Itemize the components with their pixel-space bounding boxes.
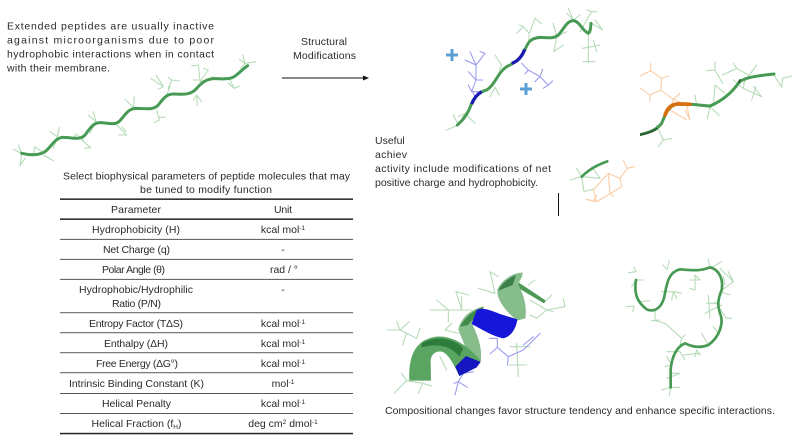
parameters table: [60, 198, 353, 434]
table heading: [63, 170, 351, 196]
parameters table: -1: [299, 339, 306, 346]
text block: useful modifications: positive charge and hydrophobicity.: [375, 177, 538, 189]
text block: useful modifications: achiev: [375, 149, 408, 161]
text block: extended peptides: with their membrane.: [6, 63, 110, 75]
parameters table: deg cm: [248, 418, 283, 430]
label: structural modifications: [293, 36, 356, 62]
parameters table: kcal mol: [261, 224, 299, 236]
label: structural modifications: Structural: [301, 36, 347, 48]
parameters table: Free Energy (ΔG°): [96, 358, 178, 370]
parameters table: -1: [299, 225, 306, 232]
text block: useful modifications: activity include modifications of net: [375, 163, 551, 175]
parameters table: Intrinsic Binding Constant (K): [69, 378, 204, 390]
parameters table: Net Charge (q): [103, 244, 170, 256]
text block: useful modifications: Useful: [375, 135, 405, 147]
table heading: be tuned to modify function: [140, 184, 272, 196]
parameters table: Entropy Factor (TΔS): [89, 318, 183, 330]
parameters table: H: [173, 424, 178, 431]
parameters table: Helical Fraction (f: [92, 418, 173, 430]
table heading: Select biophysical parameters of peptide molecules that may: [63, 170, 351, 182]
parameters table: -: [281, 284, 285, 296]
parameters table: -1: [299, 399, 306, 406]
parameters table: mol: [272, 378, 289, 390]
parameters table: Hydrophobic/Hydrophilic: [79, 284, 193, 296]
text block: extended peptides: hydrophobic interactions when in contact: [7, 49, 214, 61]
parameters table: Polar Angle (θ): [102, 264, 165, 276]
parameters table: kcal mol: [261, 338, 299, 350]
plus charge icon: [446, 49, 458, 61]
parameters table: kcal mol: [261, 358, 299, 370]
arrow: [282, 76, 369, 80]
parameters table: -1: [289, 379, 295, 386]
label: structural modifications: Modifications: [293, 50, 356, 62]
parameters table: -1: [312, 419, 318, 426]
plus charge icon: [520, 83, 532, 95]
parameters table: Enthalpy (ΔH): [104, 338, 168, 350]
text block: extended peptides: [6, 20, 215, 75]
parameters table: Hydrophobicity (H): [92, 224, 180, 236]
parameters table: Parameter: [111, 204, 162, 216]
vertical line: [558, 193, 560, 216]
extended peptide molecule: [13, 55, 256, 166]
parameters table: Ratio (P/N): [112, 298, 161, 310]
cationic peptide molecule: [447, 8, 603, 130]
helical peptide ribbon molecule: [387, 272, 565, 395]
parameters table: 2: [283, 419, 287, 426]
parameters table: dmol: [286, 418, 312, 430]
text block: extended peptides: Extended peptides are usually inactive: [7, 20, 214, 32]
hydrophobic peptide fragment: [570, 161, 635, 202]
parameters table: kcal mol: [261, 398, 299, 410]
parameters table: rad / °: [270, 264, 298, 276]
coiled peptide molecule: [627, 259, 733, 396]
parameters table: Unit: [274, 204, 292, 216]
parameters table: -1: [299, 319, 306, 326]
parameters table: kcal mol: [261, 318, 299, 330]
parameters table: Helical Penalty: [102, 398, 172, 410]
hydrophobic peptide molecule: [640, 61, 792, 148]
parameters table: ): [178, 418, 181, 430]
text block: extended peptides: against microorganisms due to poor: [7, 35, 215, 47]
parameters table: -: [281, 244, 285, 256]
caption: Compositional changes favor structure tendency and enhance specific interactions.: [385, 405, 775, 417]
parameters table: -1: [299, 359, 306, 366]
text block: useful modifications: [375, 135, 551, 189]
